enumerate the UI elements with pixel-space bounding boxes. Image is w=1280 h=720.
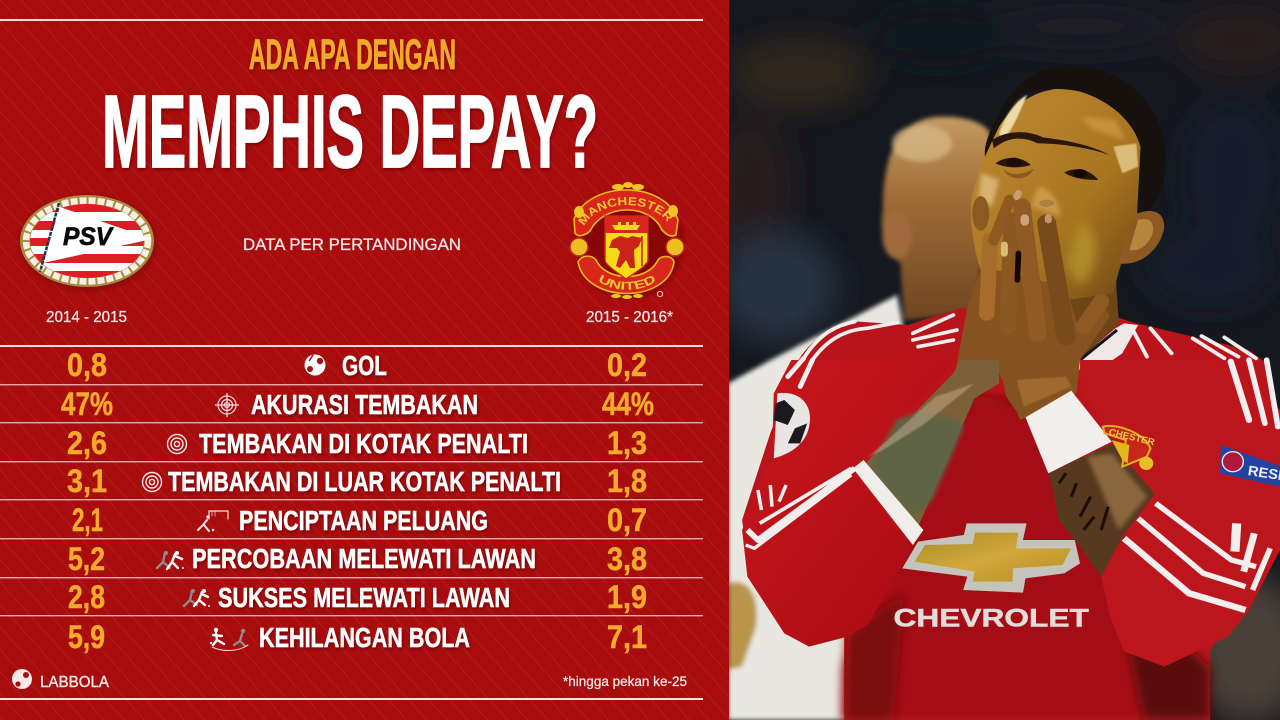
photo: main player neck: [1031, 267, 1119, 363]
row: percobaan melewati lawan: [68, 541, 647, 577]
stats rules: [0, 345, 703, 700]
photo: left cuff: [853, 460, 923, 545]
icon: successful dribble: [184, 589, 210, 607]
logo: PSV pennant: [43, 207, 152, 263]
photo: right hand base: [999, 360, 1075, 417]
logo: labbola: LABBOLA: [40, 674, 110, 691]
photo: uefa respect patch: [1220, 445, 1280, 487]
logo: footballs: [570, 238, 684, 256]
row: kehilangan bola: KEHILANGAN BOLA: [259, 622, 470, 653]
panel: red stats background: [0, 0, 729, 720]
row: akurasi tembakan: [61, 386, 654, 422]
photo: chevrolet wordmark: CHEVROLET: [893, 605, 1089, 632]
photo: left sleeve: [742, 360, 953, 647]
row: gol: [67, 347, 647, 383]
season label: Manchester United: 2015 - 2016*: [586, 309, 673, 326]
row: akurasi tembakan: 47%: [61, 386, 113, 422]
player photo: [707, 0, 1280, 720]
row: tembakan di kotak penalti: TEMBAKAN DI KOTAK PENALTI: [199, 428, 528, 459]
photo: right sleeve stripes: [1124, 503, 1270, 610]
logo: Manchester United: [569, 182, 686, 300]
logo: PSV lettering: PSV: [63, 223, 114, 251]
row: gol: 0,2: [607, 347, 647, 383]
logo: top and bottom ornaments: [574, 182, 678, 299]
row: penciptaan peluang: PENCIPTAAN PELUANG: [239, 505, 488, 536]
row: akurasi tembakan: 44%: [602, 386, 654, 422]
heading: kicker: ADA APA DENGAN: [249, 31, 456, 79]
row: gol: GOL: [342, 350, 387, 381]
row: penciptaan peluang: 0,7: [607, 502, 647, 538]
icon: rings target outside: [142, 472, 162, 492]
subtitle: per match data: DATA PER PERTANDINGAN: [243, 236, 461, 254]
photo: shoulder stripes: [788, 315, 1278, 427]
photo: praying hands: [953, 193, 1110, 420]
row: tembakan di luar kotak penalti: [67, 463, 647, 499]
photo: blurred stadium background: [707, 0, 1280, 720]
icon: crosshair target: [215, 393, 239, 417]
logo: Manchester United: MANCHESTER: [578, 197, 672, 226]
photo: right sleeve: [1080, 360, 1280, 667]
logo: PSV: [20, 195, 156, 290]
photo: crest on the shirt: CHESTER: [1107, 427, 1156, 448]
photo: main player head: [971, 65, 1166, 300]
logo: top banner: [574, 190, 678, 236]
top rule: [0, 19, 703, 21]
photo: crest on the shirt: [1103, 426, 1156, 470]
row: tembakan di luar kotak penalti: 1,8: [607, 463, 647, 499]
row: gol: 0,8: [67, 347, 107, 383]
logo: red devil: [609, 236, 642, 268]
photo: red jersey torso: [742, 308, 1280, 720]
row: tembakan di kotak penalti: 1,3: [607, 425, 647, 461]
row: percobaan melewati lawan: 5,2: [68, 541, 105, 577]
photo: background player: [728, 117, 990, 720]
photo: right tattooed forearm: [1049, 443, 1155, 577]
logo: bottom banner: [578, 256, 674, 294]
logo: shield: [605, 216, 648, 279]
icon: player shooting at goal: [198, 511, 228, 531]
logo: labbola: [12, 669, 110, 691]
row: sukses melewati lawan: SUKSES MELEWATI LAWAN: [218, 582, 510, 613]
row: sukses melewati lawan: 2,8: [68, 579, 105, 615]
photo: chevrolet bowtie: [902, 523, 1080, 593]
row: penciptaan peluang: 2,1: [72, 502, 103, 538]
row: tembakan di luar kotak penalti: 3,1: [67, 463, 107, 499]
photo: left sleeve stripes: [746, 468, 855, 548]
season label: PSV: 2014 - 2015: [46, 309, 127, 326]
photo: champions league badge: [774, 393, 810, 458]
photo: left tattooed forearm: [865, 360, 999, 527]
row: percobaan melewati lawan: 3,8: [607, 541, 647, 577]
row: tembakan di kotak penalti: [67, 425, 647, 461]
icon: football: [304, 354, 326, 376]
row: percobaan melewati lawan: PERCOBAAN MELEWATI LAWAN: [192, 543, 536, 574]
row: sukses melewati lawan: [68, 579, 647, 615]
photo: lower body of the player: [742, 360, 1280, 667]
photo: white wrist band: [1025, 391, 1112, 473]
row: tembakan di luar kotak penalti: TEMBAKAN DI LUAR KOTAK PENALTI: [168, 466, 561, 497]
logo: Manchester United: UNITED: [600, 274, 654, 290]
row: sukses melewati lawan: 1,9: [607, 579, 647, 615]
row: akurasi tembakan: AKURASI TEMBAKAN: [251, 389, 478, 420]
row: kehilangan bola: 5,9: [68, 619, 105, 655]
row: kehilangan bola: [68, 619, 647, 655]
row: tembakan di kotak penalti: 2,6: [67, 425, 107, 461]
row: kehilangan bola: 7,1: [607, 619, 647, 655]
photo: white collar: [1077, 323, 1138, 380]
icon: dribbling players: [157, 551, 184, 569]
footnote: *hingga pekan ke-25: [563, 673, 687, 689]
icon: losing the ball: [210, 628, 248, 651]
icon: rings target: [168, 434, 186, 454]
row: penciptaan peluang: [72, 502, 647, 538]
heading: title: MEMPHIS DEPAY?: [102, 74, 598, 189]
